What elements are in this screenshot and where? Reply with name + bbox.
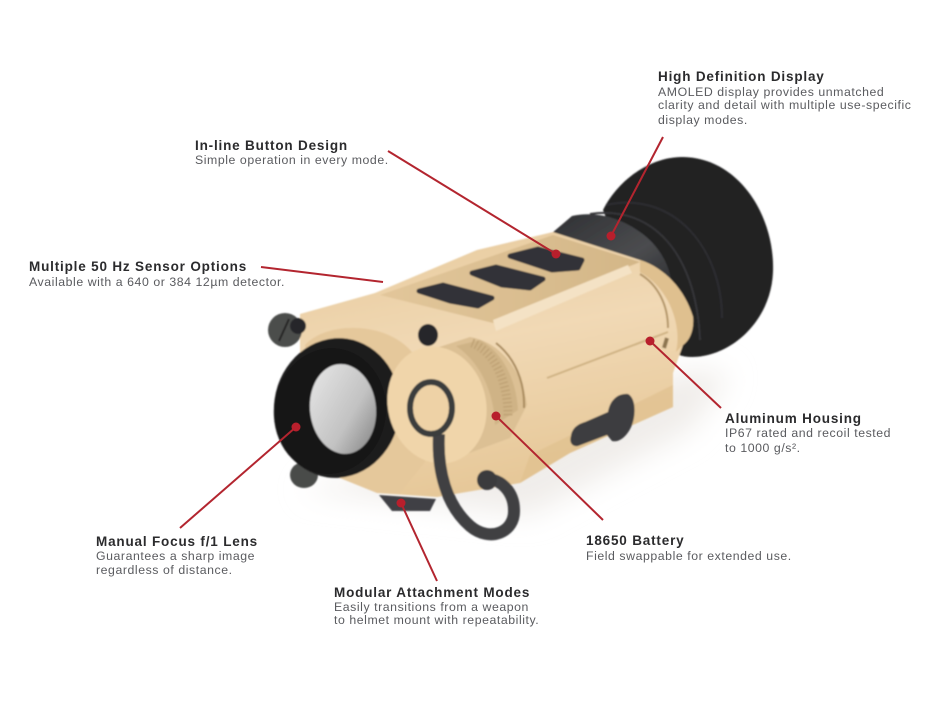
text block: In-line Button Design [195,138,389,167]
icon: battery cap tether [410,382,514,534]
text block: Manual Focus f/1 Lens: Guarantees a sharp image [96,549,255,563]
text block: Manual Focus f/1 Lens [96,534,258,577]
text block: Modular Attachment Modes: Modular Attachment Modes [334,585,530,600]
callout line: manual focus lens [180,422,300,528]
icon: housing body [300,232,693,497]
text block: Aluminum Housing: to 1000 g/s². [725,441,801,455]
icon: middle buttons [472,267,543,288]
text block: High Definition Display: AMOLED display provides unmatched [658,85,884,99]
text block: Multiple 50 Hz Sensor Options: Available with a 640 or 384 12µm detector. [29,275,285,289]
icon: battery cap [375,336,527,474]
text block: In-line Button Design: In-line Button Design [195,138,348,153]
text block: In-line Button Design: Simple operation in every mode. [195,153,389,167]
icon: top-left adjustment screw [268,313,306,347]
text block: Manual Focus f/1 Lens: Manual Focus f/1 Lens [96,534,258,549]
text block: High Definition Display [658,69,911,127]
icon: front buttons [419,285,492,306]
callout line: sensor options [261,267,383,282]
text block: Modular Attachment Modes: to helmet mount with repeatability. [334,613,539,627]
text block: Modular Attachment Modes: Easily transitions from a weapon [334,600,529,614]
text block: Manual Focus f/1 Lens: regardless of distance. [96,563,233,577]
text block: Multiple 50 Hz Sensor Options: Multiple 50 Hz Sensor Options [29,259,247,274]
text block: High Definition Display: clarity and detail with multiple use-specific [658,98,911,112]
text block: 18650 Battery: Field swappable for extended use. [586,549,792,563]
icon: lens barrel [265,330,409,486]
ground shadow [300,370,730,515]
product illustration: thermal monocular [265,157,773,534]
icon: rear buttons [510,249,582,270]
text block: Modular Attachment Modes [334,585,539,627]
text block: Multiple 50 Hz Sensor Options [29,259,285,289]
callout line: high definition display [606,137,663,240]
text block: High Definition Display: High Definition Display [658,69,825,84]
icon: lens shoulder [305,328,425,493]
icon: lens glass [305,361,381,457]
text block: Aluminum Housing [725,411,891,455]
text block: Aluminum Housing: Aluminum Housing [725,411,862,426]
icon: button panel [380,235,640,331]
text block: 18650 Battery: 18650 Battery [586,533,684,548]
callout line: in-line button design [388,151,560,258]
icon: lower lens screw [290,462,318,488]
icon: side latch [570,394,635,446]
icon: small top screw [418,324,438,346]
icon: rubber eyecup [590,157,773,357]
icon: mount foot [379,495,436,511]
callout line: aluminum housing [646,336,721,408]
text block: Aluminum Housing: IP67 rated and recoil tested [725,426,891,440]
icon: rear housing notch [664,338,667,348]
callout line: 18650 battery [492,412,603,520]
text block: High Definition Display: display modes. [658,113,748,127]
icon: eyepiece tube [552,214,672,290]
callout line: modular attachment [396,498,437,581]
text block: 18650 Battery [586,533,792,563]
